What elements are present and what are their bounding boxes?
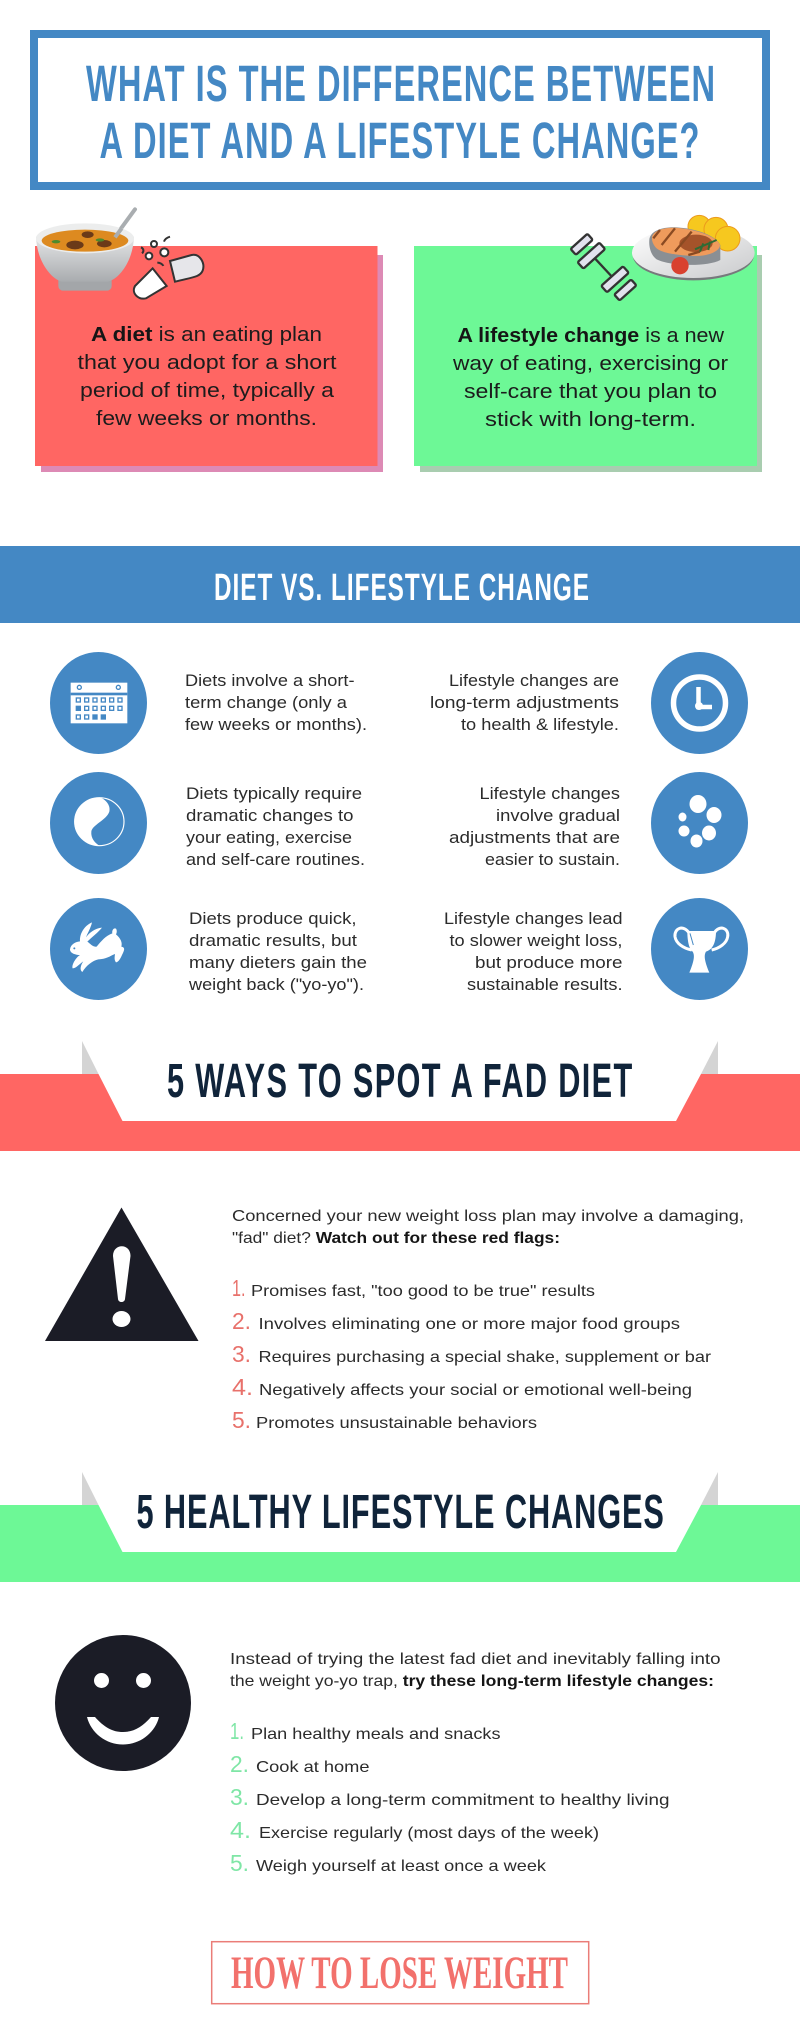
text: diet definition: that you adopt for a short bbox=[78, 352, 337, 374]
text: lifestyle sustainable bbox=[444, 910, 622, 994]
text: diets short-term: term change (only a bbox=[185, 694, 348, 712]
list: lifestyle changes: Cook at home bbox=[256, 1759, 370, 1776]
ribbon heading: 5 ways to spot a fad diet bbox=[0, 1041, 800, 1151]
text: healthy changes intro: Instead of trying the latest fad diet and inevitably falling into bbox=[230, 1651, 721, 1668]
text: diets short-term bbox=[185, 672, 367, 734]
text: diets short-term: Diets involve a short- bbox=[185, 672, 354, 690]
icon: calendar bbox=[50, 652, 147, 754]
text: lifestyle sustainable: to slower weight loss, bbox=[450, 932, 622, 950]
text: lifestyle long-term: to health & lifestyle. bbox=[461, 716, 619, 734]
title box bbox=[34, 34, 766, 186]
icon: soup bowl bbox=[36, 209, 135, 291]
icon: dumbbell bbox=[571, 234, 636, 301]
row 1 left: calendar and short-term bbox=[50, 652, 367, 754]
text: diets short-term: few weeks or months). bbox=[185, 716, 367, 734]
text: lifestyle sustainable: but produce more bbox=[475, 954, 622, 972]
list: red flags: 3. bbox=[232, 1341, 251, 1367]
list: lifestyle changes: Develop a long-term commitment to healthy living bbox=[256, 1792, 670, 1809]
text: lifestyle gradual: adjustments that are bbox=[449, 829, 620, 847]
ribbon heading: 5 ways to spot a fad diet: 5 WAYS TO SPOT A FAD DIET bbox=[167, 1054, 633, 1108]
text: fad diet intro bbox=[232, 1208, 744, 1247]
list: lifestyle changes: 4. bbox=[230, 1817, 251, 1843]
text: fad diet intro: Concerned your new weight loss plan may involve a damaging, bbox=[232, 1208, 744, 1225]
list: red flags: Promotes unsustainable behaviors bbox=[256, 1415, 537, 1432]
text: lifestyle gradual: involve gradual bbox=[496, 807, 620, 825]
text: diets quick results: many dieters gain the bbox=[189, 954, 367, 972]
text: lifestyle long-term bbox=[430, 672, 619, 734]
text: diets quick results: Diets produce quick, bbox=[189, 910, 356, 928]
text: lifestyle gradual bbox=[449, 785, 620, 869]
list: lifestyle changes: Exercise regularly (most days of the week) bbox=[259, 1825, 599, 1842]
icon: salmon plate bbox=[632, 215, 755, 280]
text: fad diet intro: "fad" diet? Watch out for these red flags: bbox=[232, 1230, 560, 1247]
list: lifestyle changes: 3. bbox=[230, 1784, 249, 1810]
text: lifestyle long-term: Lifestyle changes are bbox=[449, 672, 619, 690]
list: lifestyle changes: 1. bbox=[230, 1718, 244, 1744]
call to action: how to lose weight: HOW TO LOSE WEIGHT bbox=[231, 1947, 568, 1999]
list: red flags: Involves eliminating one or more major food groups bbox=[258, 1316, 680, 1333]
icon: warning triangle bbox=[45, 1208, 198, 1341]
text: healthy changes intro: the weight yo-yo trap, try these long-term lifestyle changes: bbox=[230, 1673, 714, 1690]
text: lifestyle definition: A lifestyle change is a new bbox=[458, 325, 725, 347]
icon: smiley face bbox=[55, 1635, 191, 1771]
panel: lifestyle change definition bbox=[414, 215, 762, 472]
text: diets dramatic bbox=[186, 785, 365, 869]
list: lifestyle changes: Plan healthy meals and snacks bbox=[251, 1726, 500, 1743]
row 2 right: dots and gradual adjustments bbox=[449, 772, 748, 874]
text: diets dramatic: and self-care routines. bbox=[186, 851, 365, 869]
text: lifestyle gradual: Lifestyle changes bbox=[480, 785, 620, 803]
text: diet definition bbox=[78, 324, 337, 430]
title box: WHAT IS THE DIFFERENCE BETWEEN bbox=[86, 56, 715, 113]
text: lifestyle definition: way of eating, exercising or bbox=[452, 353, 728, 375]
text: diets quick results: dramatic results, but bbox=[189, 932, 357, 950]
text: diet definition: few weeks or months. bbox=[96, 408, 317, 430]
icon: clock bbox=[651, 652, 748, 754]
list: red flags: 4. bbox=[232, 1374, 253, 1400]
text: lifestyle definition: stick with long-term. bbox=[485, 409, 696, 431]
icon: trophy bbox=[651, 898, 748, 1000]
list: red flags: Promises fast, "too good to be true" results bbox=[251, 1283, 595, 1300]
list: red flags: 5. bbox=[232, 1407, 251, 1433]
ribbon heading: 5 healthy lifestyle changes bbox=[0, 1472, 800, 1582]
ribbon heading: 5 healthy lifestyle changes: 5 HEALTHY LIFESTYLE CHANGES bbox=[136, 1485, 664, 1539]
title box: A DIET AND A LIFESTYLE CHANGE? bbox=[100, 113, 700, 170]
row 3 left: rabbit and quick results bbox=[50, 898, 367, 1000]
text: diets quick results: weight back ("yo-yo"). bbox=[188, 976, 364, 994]
row 3 right: trophy and sustainable results bbox=[444, 898, 748, 1000]
icon: rabbit bbox=[50, 898, 147, 1000]
list: red flags: Negatively affects your social or emotional well-being bbox=[259, 1382, 692, 1399]
icon: yin yang bbox=[50, 772, 147, 874]
text: diet definition: A diet is an eating plan bbox=[91, 324, 322, 346]
text: diet definition: period of time, typically a bbox=[80, 380, 335, 402]
list: lifestyle changes bbox=[230, 1718, 670, 1876]
text: lifestyle long-term: long-term adjustments bbox=[430, 694, 619, 712]
list: lifestyle changes: Weigh yourself at least once a week bbox=[256, 1858, 547, 1875]
text: healthy changes intro bbox=[230, 1651, 721, 1690]
text: diets dramatic: your eating, exercise bbox=[186, 829, 352, 847]
row 2 left: yin yang and dramatic changes bbox=[50, 772, 365, 874]
text: lifestyle gradual: easier to sustain. bbox=[485, 851, 620, 869]
list: lifestyle changes: 2. bbox=[230, 1751, 249, 1777]
text: diets dramatic: Diets typically require bbox=[186, 785, 362, 803]
list: red flags: Requires purchasing a special shake, supplement or bar bbox=[258, 1349, 712, 1366]
list: red flags: 2. bbox=[232, 1308, 251, 1334]
list: red flags: 1. bbox=[232, 1275, 246, 1301]
heading band: diet vs lifestyle change bbox=[0, 546, 800, 623]
text: diets dramatic: dramatic changes to bbox=[186, 807, 354, 825]
text: lifestyle sustainable: sustainable results. bbox=[467, 976, 622, 994]
list: lifestyle changes: 5. bbox=[230, 1850, 249, 1876]
panel: diet definition bbox=[35, 209, 383, 472]
call to action: how to lose weight bbox=[212, 1942, 589, 2004]
icon: gradual dots bbox=[651, 772, 748, 874]
icon: broken capsule bbox=[134, 237, 203, 299]
row 1 right: clock and long-term bbox=[430, 652, 748, 754]
text: lifestyle definition: self-care that you plan to bbox=[464, 381, 717, 403]
text: lifestyle definition bbox=[452, 325, 728, 431]
heading band: diet vs lifestyle change: DIET VS. LIFESTYLE CHANGE bbox=[214, 565, 589, 608]
list: red flags bbox=[232, 1275, 712, 1433]
text: diets quick results bbox=[188, 910, 367, 994]
text: lifestyle sustainable: Lifestyle changes lead bbox=[444, 910, 622, 928]
